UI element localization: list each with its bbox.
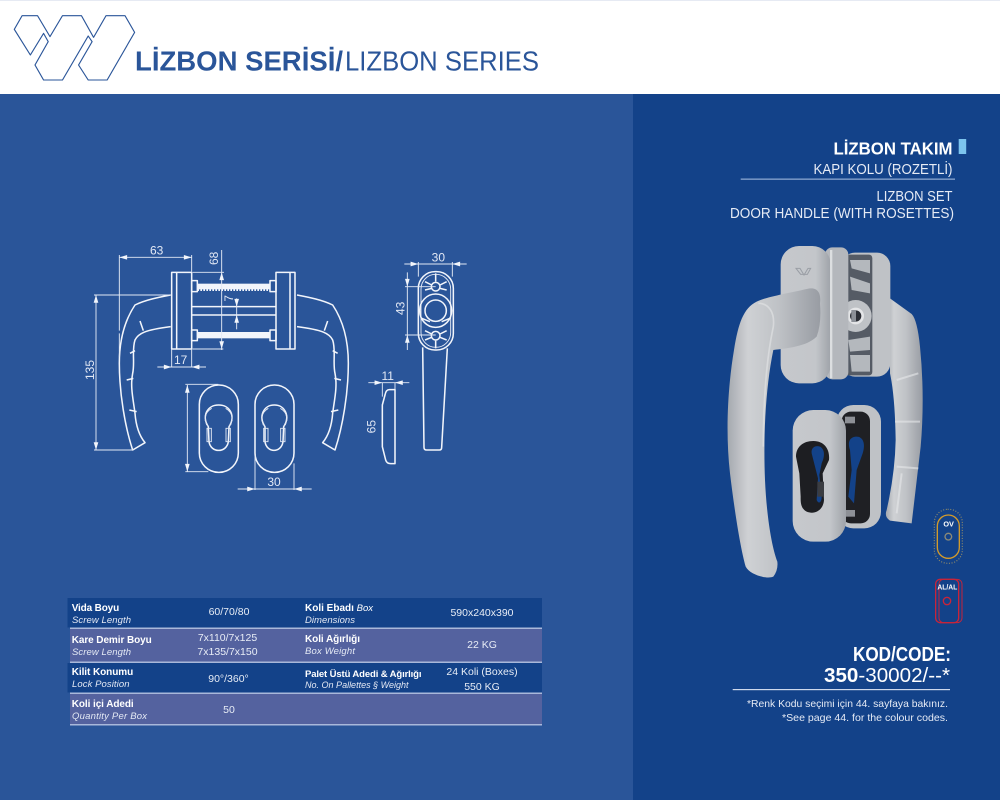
front rosette	[781, 246, 848, 383]
dimension 30	[238, 455, 312, 490]
dimension 43: 43	[394, 301, 408, 315]
row 1	[68, 598, 542, 628]
dimension 65: 65	[364, 420, 378, 433]
row 4: Koli içi Adedi	[72, 699, 134, 710]
product code: KOD/CODE:	[853, 644, 951, 666]
dimension 7: 7	[222, 295, 236, 302]
product heading: LIZBON SET	[876, 188, 952, 205]
title: LIZBON SERIES	[345, 46, 539, 76]
dimension escutcheon height	[185, 384, 218, 472]
right handle outline	[297, 295, 348, 450]
row 4: Quantity Per Box	[72, 711, 148, 722]
logo	[14, 16, 135, 80]
specification table	[68, 598, 542, 726]
dimension 7	[222, 295, 237, 329]
dimension 135	[83, 295, 171, 450]
dimension 30: 30	[267, 475, 281, 489]
back rosette	[840, 253, 890, 377]
escutcheon side profile	[382, 390, 395, 464]
row 1: Vida Boyu	[72, 603, 119, 614]
dimension 63: 63	[150, 243, 164, 257]
row 1: Koli Ebadı Box	[305, 603, 374, 614]
row 2: Screw Length	[72, 647, 131, 658]
row 1: 590x240x390	[450, 607, 514, 619]
row 2: 7x135/7x150	[197, 646, 258, 658]
dimension 135: 135	[83, 360, 97, 380]
colour code note	[747, 698, 948, 724]
colour code note: *Renk Kodu seçimi için 44. sayfaya bakınız.	[747, 698, 948, 710]
left rosette	[172, 272, 192, 349]
row 1: Screw Length	[72, 615, 131, 626]
row 3: Lock Position	[72, 679, 130, 690]
dimension 63	[119, 243, 192, 357]
header background	[0, 0, 1000, 94]
dimension 11: 11	[381, 369, 394, 383]
dimension 11	[368, 369, 409, 397]
row 2: Kare Demir Boyu	[72, 635, 152, 646]
row 4	[70, 694, 542, 724]
accent square	[959, 139, 966, 154]
dimension 68	[193, 250, 224, 350]
finish swatch: AL/AL: AL/AL	[937, 585, 958, 592]
product photo: handle set	[728, 246, 923, 577]
product heading: KAPI KOLU (ROZETLİ)	[814, 160, 952, 178]
row 3: Kilit Konumu	[72, 667, 133, 678]
finish swatch: OV	[934, 509, 962, 563]
dimension 43	[394, 272, 436, 350]
product heading: DOOR HANDLE (WITH ROSETTES)	[730, 205, 954, 222]
product code	[824, 644, 951, 687]
escutcheon front plate	[793, 410, 846, 542]
row 1: Dimensions	[305, 615, 355, 626]
dimension 17: 17	[174, 353, 188, 367]
right escutcheon	[255, 385, 294, 472]
product heading: LİZBON TAKIM	[834, 138, 952, 158]
row 3	[68, 663, 542, 693]
front lever	[728, 288, 820, 577]
right panel background	[633, 94, 1000, 800]
row 3: No. On Pallettes § Weight	[305, 680, 409, 690]
row 3: 24 Koli (Boxes)	[446, 666, 518, 678]
row 1: 60/70/80	[209, 606, 250, 618]
dimension 30	[404, 250, 467, 277]
finish swatch: OV: OV	[943, 520, 954, 529]
row 2	[70, 629, 542, 662]
right rosette	[276, 272, 295, 349]
title: LİZBON SERİSİ/	[135, 46, 343, 76]
technical drawing: front view	[83, 243, 348, 490]
dimension 30: 30	[432, 250, 445, 264]
title	[135, 46, 539, 76]
row 3: 550 KG	[464, 681, 500, 693]
rosette with lever	[418, 272, 453, 450]
left handle outline	[119, 295, 171, 450]
left panel background	[0, 94, 633, 800]
technical drawing: side view	[364, 250, 467, 464]
finish swatch: AL/AL	[936, 579, 962, 623]
product heading	[730, 138, 966, 222]
back lever	[886, 298, 923, 523]
row 2: Box Weight	[305, 646, 355, 657]
row 2: 22 KG	[467, 639, 497, 651]
product code: 350-30002/--*	[824, 665, 950, 687]
escutcheon back plate	[837, 405, 881, 528]
colour code note: *See page 44. for the colour codes.	[782, 712, 948, 724]
dimension 68: 68	[207, 251, 221, 265]
dimension 17	[157, 349, 206, 367]
left escutcheon	[199, 385, 238, 472]
row 2: Koli Ağırlığı	[305, 634, 360, 645]
screws and spindles	[192, 281, 276, 341]
row 3: 90°/360°	[208, 673, 249, 685]
row 4: 50	[223, 704, 235, 716]
logo mark on rosette	[796, 268, 811, 275]
row 3: Palet Üstü Adedi & Ağırlığı	[305, 669, 422, 680]
row 2: 7x110/7x125	[198, 632, 257, 644]
